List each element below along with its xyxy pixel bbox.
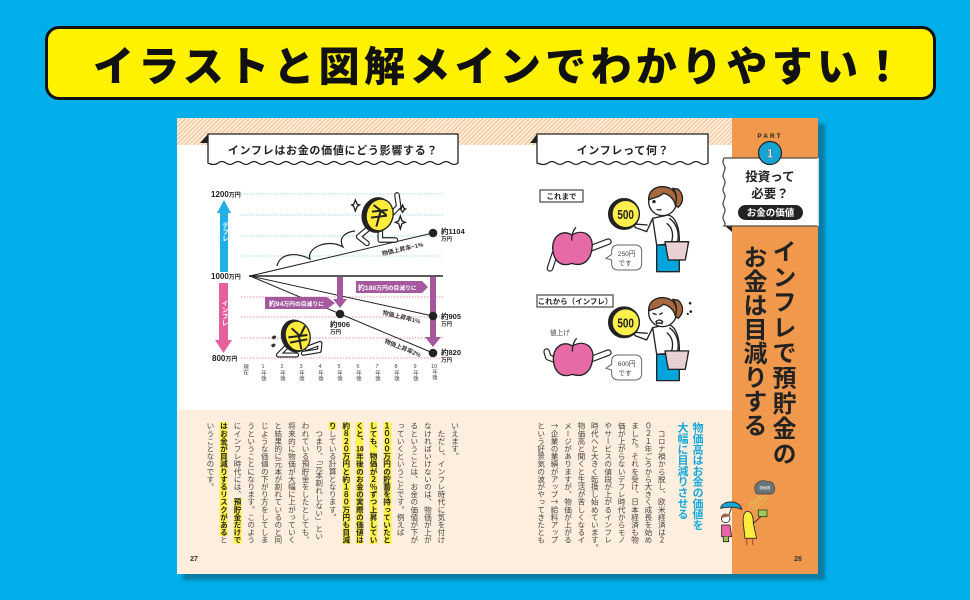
icon: running coin [352,194,406,243]
book spread [177,118,818,574]
x axis labels: 7年後 [374,364,381,381]
panel: part header box: PART [757,133,783,140]
arrow: deflation up [217,200,231,272]
value labels: 万円 [441,321,453,328]
chart: inflation effect on money value: 約180万円の目減りに [358,283,417,292]
arrow: deflation up: デフレ [220,221,229,242]
value labels: 万円 [330,329,342,336]
y axis labels: 1000万円 [211,272,241,281]
icon: apple after, 600 yen: 値上げ [550,328,570,337]
body text: left column: くと、 10 年後のお金の実際の価値は [354,422,365,544]
body text: left column: るということは、お金の価値が下が [409,422,420,544]
subheading: 大幅に目減りさせる [675,422,691,519]
body text: left column: 約８２０万円と約１８０万円も目減 [341,422,352,544]
line labels: 物価上昇率2% [383,337,423,359]
body text: right column [536,422,667,551]
cloud behind rising coin [277,231,355,266]
body text: left column: なければいけないのは、物価が上が [422,422,433,544]
value labels: 約905 [441,311,461,321]
arrow: inflation down: インフレ [220,300,228,326]
x axis labels [242,364,438,381]
body text: left column: うということになります。このよう [246,422,257,544]
heading tab: right: インフレって何？ [577,143,669,157]
panel: before inflation label [540,190,583,202]
body text: left column: り している計算となります。 [327,422,338,521]
page number 27: 27 [190,556,198,563]
orange side column [732,118,818,574]
body text: left column: われている預貯金をしたとしても、 [300,422,311,544]
panel: part header box: 1 [767,146,774,160]
body text: left column: しても、物価が２％ずつ上昇してい [368,422,379,544]
subheading: 物価高はお金の価値を [690,422,706,530]
body text: left column: １０００万円の貯蓄を持っていたと [382,422,393,544]
x axis labels: 1年後 [260,364,267,381]
x axis labels: 4年後 [317,364,324,381]
icon: apple after, 600 yen: 600円 [618,360,636,368]
data points [336,229,437,357]
y axis labels [211,190,241,363]
body text: left column: つまり、「元本割れしない」とい [314,430,325,540]
x axis labels: 年後 [431,368,438,380]
body text: left column: じような価値の下がり方をしてしま [259,422,270,544]
icon: worried woman with 500 coin [609,298,692,381]
line labels: 物価上昇率1% [382,308,422,326]
heading tab: left [200,134,458,164]
line labels [381,240,425,359]
panel: part header box [723,133,818,232]
chart: inflation effect on money value [211,190,466,381]
body text: right column: コロナ禍から脱し、欧米経済は２ [656,430,667,544]
value labels: 万円 [441,357,453,364]
x axis labels: 現在 [242,364,249,375]
x axis labels: 10 [431,364,437,370]
panel: part header box: お金の価値 [747,207,795,219]
book shadow [183,124,825,580]
icon: fallen coin [271,316,320,356]
body text: right column: 価が上がらないデフレ時代からモノ [616,422,627,544]
icon: rain cloud and people with umbrella [721,481,775,545]
x axis labels: 2年後 [279,364,286,381]
icon: apple after, 600 yen: です [618,369,632,377]
value labels: 約820 [441,347,461,357]
body text: left column: いえます。 [450,422,461,460]
x axis labels: 8年後 [393,364,400,381]
icon: apple after, 600 yen [547,328,642,380]
value labels: 万円 [441,236,453,243]
purple decrease arrows [265,277,441,347]
x axis labels: 9年後 [412,364,419,381]
panel: part header box: 投資って [745,169,795,184]
body text: right column: メージがありますが、物価が上がる [563,422,574,544]
body text: right column: →企業の業績がアップ→給料アップ [549,422,560,544]
body text: left column: 将来的に物価が大幅に上がっていく [286,422,297,544]
x axis labels: 5年後 [336,364,343,381]
body text: right column: という好景気の波がやってきたとも [536,422,547,544]
heading tab: right [530,134,708,164]
chart: inflation effect on money value: 約94万円の目減りに [269,299,324,308]
icon: woman with 500 coin, before [609,187,689,272]
body text: right column: やサービスの値段が上がるインフレ [603,422,614,544]
value labels [330,226,466,364]
body text: left column: ただし、インフレ時代に気を付け [436,430,447,544]
panel: before inflation label: これまで [546,192,577,201]
body text: right column: 物価高と聞くと生活が苦しくなるイ [576,422,587,544]
body text: right column: ました。それを受け、日本経済も物 [630,422,641,544]
y axis labels: 800万円 [212,354,237,363]
value labels: 約906 [330,319,350,329]
title line 2: お金は目減りする [738,245,773,437]
body text: left column: はお金が目減りするリスクがある と [218,422,229,544]
panel: after inflation label: これから（インフレ） [538,297,612,306]
body text: right column: 時代へと大きく転換し始めています。 [589,422,600,551]
icon: worried woman with 500 coin: 500 [617,315,634,330]
icon: woman with 500 coin, before: 500 [617,207,634,222]
body text: right column: ０２１年ごろから大きく成長を始め [643,422,654,544]
body text: left column: いうことなのです。 [205,422,216,490]
heading tab: left: インフレはお金の価値にどう影響する？ [228,143,438,157]
cream text panel [177,410,732,574]
value labels: 約1104 [441,226,466,236]
baseline and rate lines [249,233,443,353]
x axis labels: 6年後 [355,364,362,381]
icon: apple before, 250 yen: です [618,259,632,267]
arrow: inflation down [215,283,232,353]
icon: rain cloud and people with umbrella: 物価高 [759,485,771,490]
hatched top strip [177,118,732,145]
y axis labels: 1200万円 [211,190,241,199]
panel: part header box: 必要？ [751,186,789,201]
chapter title vertical text [738,239,802,467]
body text: left column: にインフレ時代には、 預貯金だけで [232,422,243,544]
title banner: イラストと図解メインでわかりやすい！ [93,33,908,93]
title line 1: インフレで預貯金の [767,239,802,467]
body text: left column: と結果的に元本が割れているのと同 [273,422,284,544]
x axis labels: 3年後 [298,364,305,381]
line labels: 物価上昇率−1% [381,240,425,258]
body text: left column: っていくということです。例えば [395,422,406,536]
icon: apple before, 250 yen: 250円 [618,250,636,258]
subheading [675,422,706,530]
body text: left column [205,422,461,544]
icon: apple before, 250 yen [550,227,642,270]
page number 26: 26 [794,556,802,563]
